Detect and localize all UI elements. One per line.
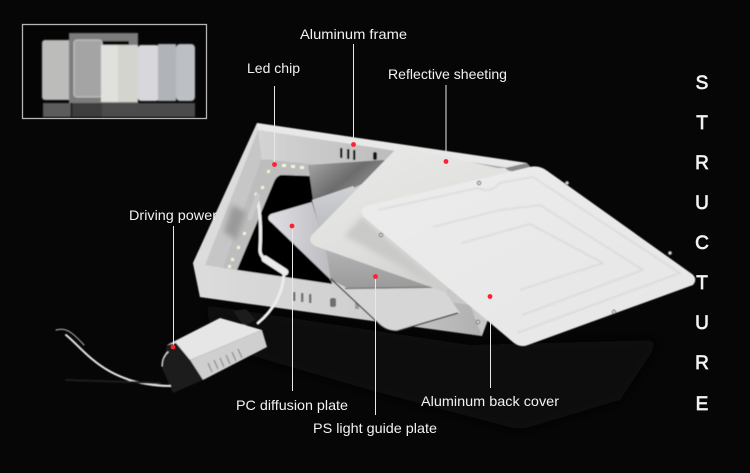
- label: driving power: Driving power: [129, 207, 217, 223]
- vertical title: STRUCTURE: T: [696, 113, 708, 134]
- driving power cable: [250, 194, 285, 323]
- label: reflective sheeting: Reflective sheeting: [388, 66, 507, 82]
- leader lines: [174, 44, 490, 415]
- reflective sheeting: [310, 147, 536, 292]
- dark cavity behind plates: [237, 175, 332, 284]
- label: led chip: Led chip: [247, 60, 300, 76]
- vertical title: STRUCTURE: U: [695, 193, 709, 214]
- vertical title: STRUCTURE: U: [695, 313, 709, 334]
- red marker dots: [171, 142, 492, 349]
- label: aluminum frame: Aluminum frame: [300, 26, 407, 42]
- PC diffusion plate: [268, 202, 331, 280]
- label: PS light guide plate: PS light guide plate: [313, 420, 437, 436]
- PS light guide plate: [308, 160, 460, 331]
- aluminum frame: [193, 123, 540, 336]
- screw lugs: [379, 181, 672, 324]
- vertical title: STRUCTURE: C: [695, 233, 709, 254]
- aluminum back cover: [362, 166, 695, 346]
- driver box: [162, 309, 267, 393]
- vertical title: STRUCTURE: R: [695, 353, 709, 374]
- product photo scene: [56, 123, 695, 393]
- vertical title: STRUCTURE: [695, 73, 709, 415]
- inset: exploded product photo: [22, 24, 206, 118]
- vertical title: STRUCTURE: T: [696, 273, 708, 294]
- led strip: [223, 160, 310, 270]
- label: aluminum back cover: Aluminum back cover: [421, 393, 559, 409]
- shadow on reflective sheeting: [345, 216, 445, 290]
- label: PC diffusion plate: PC diffusion plate: [236, 397, 348, 413]
- vertical title: STRUCTURE: S: [696, 73, 708, 94]
- product reflection on floor: [205, 305, 660, 430]
- frame vent slots: [340, 148, 377, 160]
- driver wires: [56, 329, 170, 386]
- vertical title: STRUCTURE: R: [695, 153, 709, 174]
- vertical title: STRUCTURE: E: [696, 394, 708, 415]
